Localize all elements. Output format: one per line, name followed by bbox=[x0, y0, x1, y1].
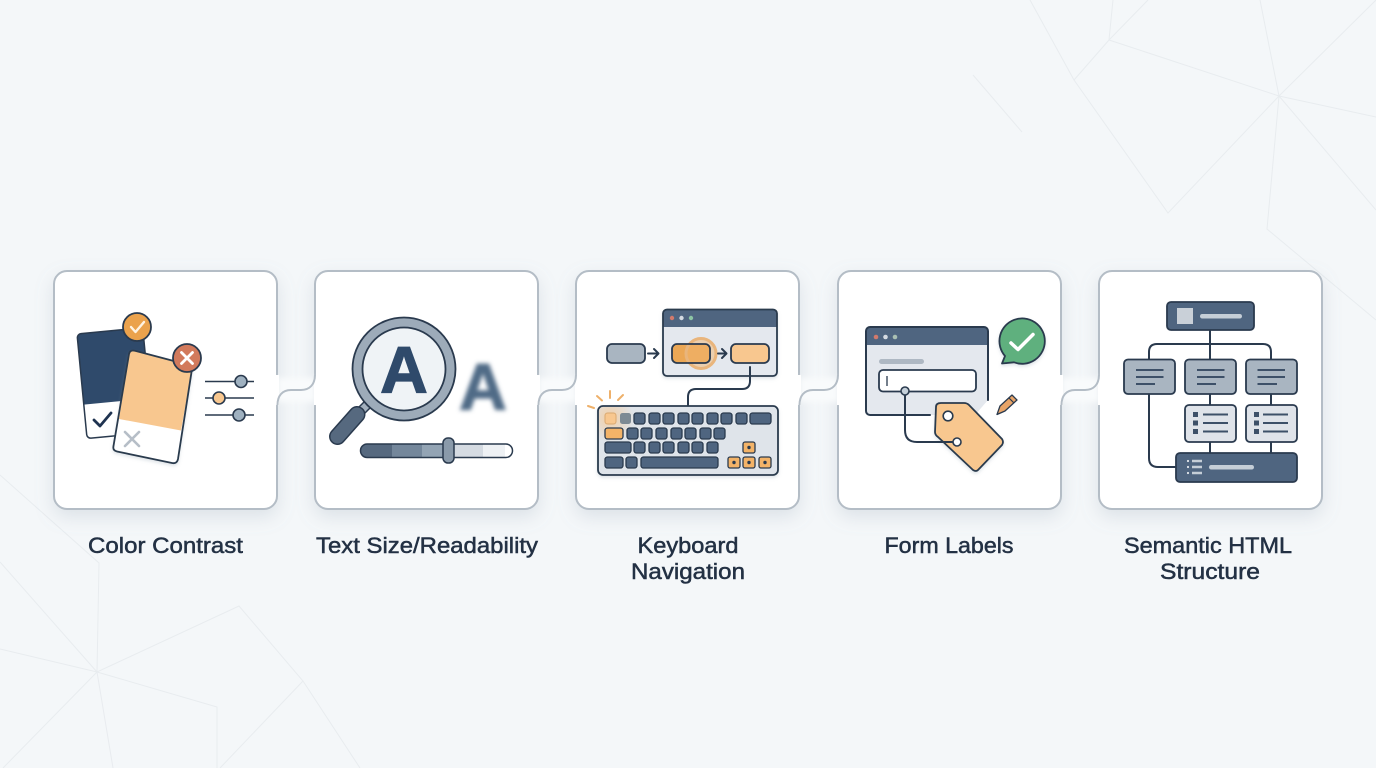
icon: focused orange button bbox=[672, 338, 716, 368]
label: semantic html structure: Semantic HTML bbox=[1124, 533, 1292, 558]
large sharp letter A: A bbox=[380, 332, 428, 406]
label: form labels: Form Labels bbox=[884, 533, 1014, 558]
icon: light colour swatch card bbox=[113, 351, 192, 463]
panel: color contrast bbox=[54, 271, 277, 509]
arrow bbox=[648, 349, 658, 358]
icon: orange check badge bbox=[123, 313, 151, 341]
section node 2 bbox=[1185, 360, 1236, 394]
header node bbox=[1167, 302, 1254, 330]
form input field bbox=[879, 370, 976, 392]
label: keyboard navigation: Keyboard bbox=[638, 533, 738, 558]
icon: dark colour swatch card bbox=[77, 328, 153, 439]
icon: green check speech bubble bbox=[999, 318, 1045, 364]
connector: form labels to semantic structure bbox=[1058, 375, 1103, 405]
connector: color contrast to text size bbox=[274, 375, 319, 405]
icon: light orange button bbox=[731, 344, 769, 363]
label: keyboard navigation: Navigation bbox=[631, 559, 745, 584]
section node 1 bbox=[1124, 360, 1175, 394]
label: text size and readability: Text Size/Readability bbox=[316, 533, 539, 558]
section node 3 bbox=[1246, 360, 1297, 394]
blurred letter A: A bbox=[459, 350, 507, 424]
footer node bbox=[1176, 453, 1297, 482]
panel: keyboard navigation bbox=[576, 271, 799, 509]
label: semantic html structure: Structure bbox=[1160, 559, 1260, 584]
panel: text size and readability bbox=[315, 271, 538, 509]
icon: magnifying glass lens bbox=[352, 318, 456, 420]
icon: browser window bbox=[663, 310, 777, 376]
label: keyboard navigation bbox=[631, 533, 745, 584]
icon: pencil bbox=[997, 395, 1017, 414]
panel: form labels bbox=[838, 271, 1061, 509]
connector: keyboard to form labels bbox=[796, 375, 842, 405]
icon: price tag label bbox=[935, 403, 1003, 471]
icon: grey cross bbox=[125, 432, 139, 446]
tree connector lines bbox=[1149, 330, 1271, 467]
icon: grey start button bbox=[607, 344, 645, 363]
connector from input to tag bbox=[901, 387, 961, 446]
connector: text size to keyboard bbox=[535, 375, 580, 405]
list node 2 bbox=[1246, 405, 1297, 442]
icon: adjustment sliders bbox=[205, 376, 254, 421]
arrow bbox=[718, 349, 726, 358]
icon: dark check mark bbox=[94, 413, 111, 426]
icon: magnifying glass handle bbox=[338, 400, 372, 436]
label: semantic html structure bbox=[1124, 533, 1292, 584]
icon: keyboard bbox=[596, 405, 780, 479]
icon: text size slider bbox=[360, 438, 512, 463]
label: color contrast: Color Contrast bbox=[88, 533, 244, 558]
panel: semantic html structure bbox=[1099, 271, 1322, 509]
connector line to keyboard bbox=[688, 367, 750, 406]
icon: red cross badge bbox=[173, 344, 201, 372]
icon: form window bbox=[866, 327, 988, 415]
form label placeholder bar bbox=[879, 359, 924, 364]
list node 1 bbox=[1185, 405, 1236, 442]
icon: key press spark bbox=[588, 391, 623, 408]
